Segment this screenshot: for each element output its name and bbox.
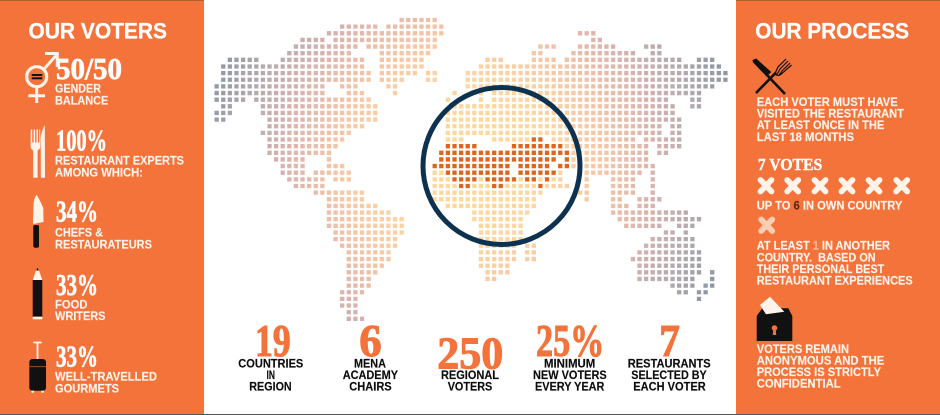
stat: restaurant experts: AMONG WHICH: [55, 165, 143, 179]
text: anonymity [757, 342, 884, 391]
stat: gender balance: 50/50 [56, 51, 122, 86]
stat: restaurant experts: RESTAURANT EXPERTS [55, 153, 184, 167]
stat: well-travelled gourmets [55, 339, 157, 395]
panel: our voters [0, 0, 204, 414]
stat: chefs and restaurateurs: RESTAURATEURS [55, 237, 152, 251]
stat: 250 regional voters: 250 [437, 327, 503, 378]
stat: 25% minimum new voters: EVERY YEAR [535, 380, 605, 394]
icon: suitcase [29, 342, 46, 393]
stat: 19 countries: IN [266, 368, 275, 382]
stat: 6 academy chairs: ACADEMY [343, 368, 398, 382]
icon: six white vote crosses [760, 180, 907, 192]
text: visit requirement: VISITED THE RESTAURANT [757, 107, 905, 121]
stat: gender balance: BALANCE [55, 94, 108, 108]
heading: our process: OUR PROCESS [755, 18, 909, 43]
stat: 6 academy chairs: MENA [354, 357, 386, 371]
icon: crossed knife and fork [753, 59, 792, 94]
icon: fork and knife [31, 125, 45, 178]
stat: well-travelled gourmets: WELL-TRAVELLED [55, 369, 157, 383]
heading: our voters: OUR VOTERS [28, 18, 167, 43]
stat: chefs and restaurateurs: CHEFS & [55, 225, 103, 239]
text: visit requirement [757, 95, 905, 144]
text: up to 6 in own country: UP TO 6 IN OWN COUNTRY [757, 198, 902, 212]
icon: ballot box [757, 297, 792, 341]
map: world land dots [215, 20, 728, 319]
icon: gender symbol [27, 54, 57, 103]
stat: chefs and restaurateurs: 34% [56, 194, 98, 229]
stat: well-travelled gourmets: GOURMETS [55, 381, 119, 395]
stat: 7 restaurants per voter [628, 315, 711, 394]
stat: food writers: FOOD [55, 297, 88, 311]
text: at least 1 in another country: AT LEAST 1 IN ANOTHER [757, 238, 890, 252]
stat: 7 restaurants per voter: EACH VOTER [633, 380, 706, 394]
stat: food writers: WRITERS [55, 309, 106, 323]
icon: chef knife [33, 195, 44, 248]
text: at least 1 in another country: THEIR PERSONAL BEST [757, 262, 885, 276]
map: highlight circle [423, 88, 580, 244]
stat: 19 countries [238, 315, 303, 394]
stat: 19 countries: COUNTRIES [238, 357, 303, 371]
text: at least 1 in another country: RESTAURANT EXPERIENCES [757, 273, 913, 287]
stat: 7 restaurants per voter: RESTAURANTS [628, 357, 711, 371]
world dot map [215, 20, 728, 319]
icon: pencil [33, 268, 42, 319]
stat: food writers: 33% [56, 267, 98, 302]
text: anonymity: PROCESS IS STRICTLY [757, 365, 881, 379]
text: visit requirement: LAST 18 MONTHS [757, 130, 854, 144]
stat: 25% minimum new voters: MINIMUM [544, 357, 595, 371]
text: anonymity: VOTERS REMAIN [757, 342, 849, 356]
stat: 6 academy chairs: 6 [359, 315, 382, 366]
text: at least 1 in another country [757, 238, 913, 287]
stat: chefs and restaurateurs [55, 194, 152, 251]
text: visit requirement: EACH VOTER MUST HAVE [757, 95, 898, 109]
text: anonymity: ANONYMOUS AND THE [757, 354, 884, 368]
stat: 25% minimum new voters [533, 315, 607, 394]
stat: food writers [55, 267, 106, 323]
stat: 6 academy chairs: CHAIRS [349, 380, 392, 394]
stat: 250 regional voters: REGIONAL [441, 368, 499, 382]
stat: restaurant experts [55, 122, 184, 179]
stat: 250 regional voters: VOTERS [448, 380, 492, 394]
panel: our process [736, 0, 940, 414]
stat: 6 academy chairs [343, 315, 398, 394]
stat: gender balance [55, 51, 122, 108]
heading: 7 votes: 7 VOTES [758, 155, 822, 174]
icon: light vote cross [761, 220, 772, 231]
stat: restaurant experts: 100% [56, 122, 107, 158]
stat: 7 restaurants per voter: SELECTED BY [631, 368, 707, 382]
stat: 19 countries: REGION [249, 380, 292, 394]
stat: 25% minimum new voters: 25% [536, 315, 604, 366]
text: at least 1 in another country: COUNTRY. BASED ON [757, 250, 876, 264]
stat: well-travelled gourmets: 33% [56, 339, 98, 374]
stat: 25% minimum new voters: NEW VOTERS [533, 368, 607, 382]
text: visit requirement: AT LEAST ONCE IN THE [757, 118, 884, 132]
stat: 7 restaurants per voter: 7 [659, 315, 680, 366]
map: highlighted MENA region dots [433, 140, 569, 186]
stat: 19 countries: 19 [255, 315, 291, 366]
stat: gender balance: GENDER [55, 82, 101, 96]
text: anonymity: CONFIDENTIAL [757, 377, 841, 391]
